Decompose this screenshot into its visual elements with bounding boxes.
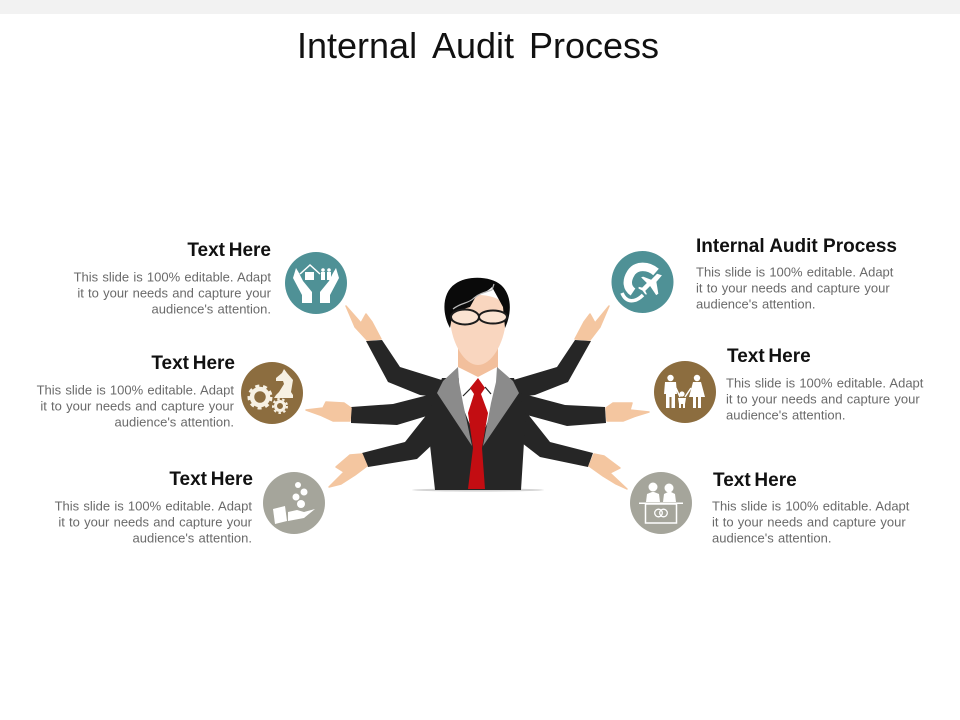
body text — [712, 498, 910, 546]
body text: audience's attention. — [712, 530, 831, 546]
body text — [74, 270, 272, 316]
title: Process — [529, 25, 659, 66]
icon: chess knight and gears — [241, 362, 303, 424]
body text: audience's attention. — [696, 296, 815, 312]
body text — [55, 498, 253, 546]
panel: middle right — [726, 346, 924, 422]
icon: airplane and hand — [612, 251, 674, 313]
icon: hands holding house and family — [285, 252, 347, 314]
body text: This slide is 100% editable. Adapt — [696, 264, 894, 280]
central businessman figure — [306, 278, 649, 492]
panel: top left — [74, 240, 272, 316]
panel: bottom right — [712, 470, 910, 546]
glasses — [451, 310, 507, 324]
suit body — [428, 378, 526, 490]
body text: This slide is 100% editable. Adapt — [712, 498, 910, 514]
hands — [306, 306, 649, 489]
body text: This slide is 100% editable. Adapt — [74, 270, 271, 284]
body text: it to your needs and capture your — [77, 286, 272, 300]
icon: hand with coins — [263, 472, 325, 534]
title: Internal — [297, 25, 417, 66]
body text: it to your needs and capture your — [40, 398, 235, 414]
body text — [37, 382, 235, 430]
title: Audit — [432, 25, 514, 66]
heading: Text Here — [713, 470, 797, 491]
shirt — [458, 367, 497, 445]
body text — [726, 376, 924, 422]
panel: middle left — [37, 353, 235, 430]
heading: Text Here — [187, 240, 271, 261]
heading: Internal Audit Process — [696, 236, 897, 257]
heading: Text Here — [169, 469, 253, 490]
body text: it to your needs and capture your — [726, 392, 920, 406]
body text: it to your needs and capture your — [712, 514, 906, 530]
tie — [468, 378, 488, 489]
body text: audience's attention. — [152, 302, 271, 316]
body text: audience's attention. — [726, 408, 845, 422]
collar strings — [463, 387, 491, 396]
heading: Text Here — [151, 353, 235, 374]
icon: family — [654, 361, 716, 423]
heading: Text Here — [727, 346, 811, 367]
body text: This slide is 100% editable. Adapt — [55, 498, 252, 514]
body text: it to your needs and capture your — [58, 514, 253, 530]
panel: bottom left — [55, 469, 253, 546]
arms — [351, 340, 606, 467]
body text: it to your needs and capture your — [696, 280, 890, 296]
panel: top right — [696, 236, 897, 312]
body text: This slide is 100% editable. Adapt — [726, 376, 924, 390]
face — [450, 295, 506, 365]
hair — [444, 278, 510, 328]
body text: audience's attention. — [115, 414, 234, 430]
lapels — [437, 367, 472, 446]
body text: audience's attention. — [133, 530, 252, 546]
icon: couple at registry desk — [630, 472, 692, 534]
body text — [696, 264, 894, 312]
neck — [458, 340, 498, 378]
body text: This slide is 100% editable. Adapt — [37, 382, 234, 398]
